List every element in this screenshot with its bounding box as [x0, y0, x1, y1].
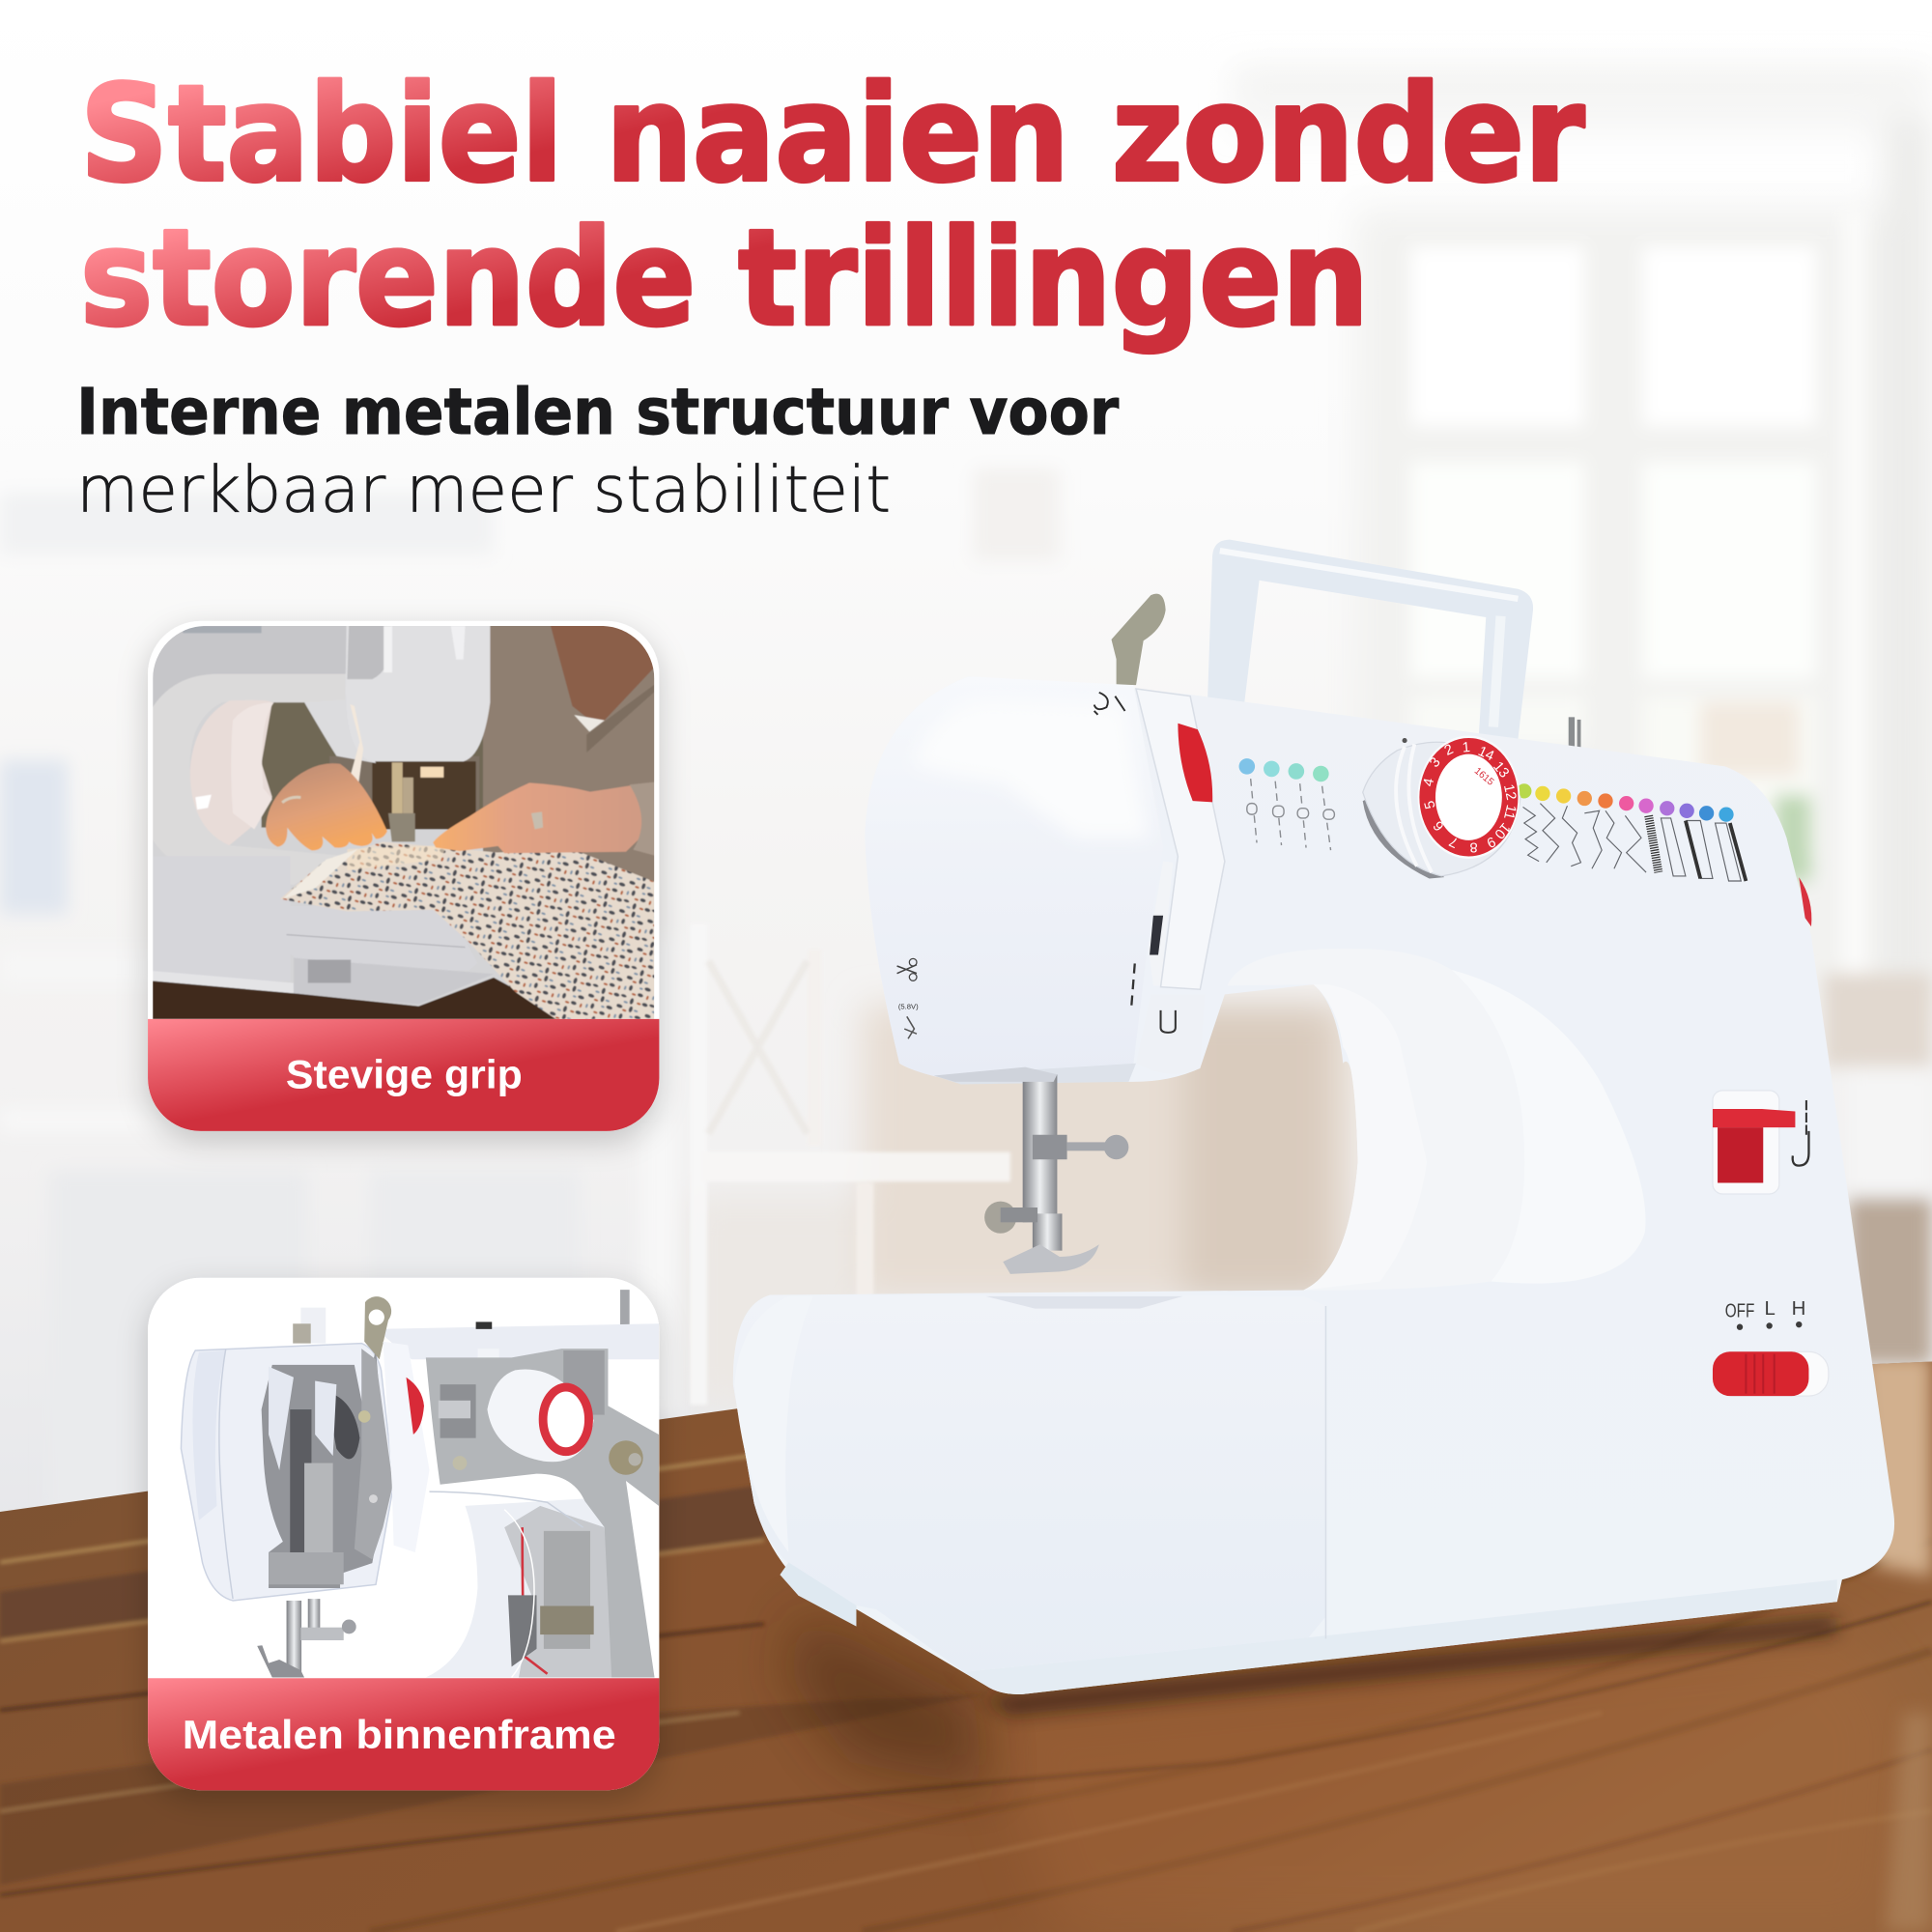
base front	[733, 1295, 1325, 1672]
presser foot	[392, 762, 403, 816]
photo: hands sewing fabric	[147, 620, 662, 1020]
frame	[426, 1349, 659, 1677]
lower body shell	[426, 1499, 605, 1677]
stitch colour dots	[1517, 783, 1734, 822]
label: Metalen binnenframe	[183, 1712, 616, 1757]
needle and presser foot	[934, 1067, 1128, 1274]
power switch labels	[1725, 1298, 1805, 1330]
red side knob	[1799, 877, 1811, 926]
table	[147, 978, 572, 1020]
card: Stevige grip	[147, 620, 662, 1131]
banner	[148, 1678, 659, 1790]
head cover	[865, 676, 1163, 1082]
thread	[350, 705, 363, 782]
sewing machine: (5.8V)	[898, 1003, 919, 1011]
front plate and gap	[1149, 862, 1173, 985]
stitch selector dial: 11	[1500, 803, 1519, 821]
tension icons and sliders	[1247, 779, 1334, 850]
stitch selector dial: 10	[1491, 819, 1513, 841]
backdrop inside throat	[262, 702, 483, 828]
label: Stevige grip	[286, 1051, 523, 1096]
stitch selector dial: 12	[1500, 783, 1519, 802]
stitch selector dial: 3	[1427, 754, 1444, 771]
lower strip	[963, 1579, 1837, 1694]
stitch selector dial: 2	[1442, 742, 1456, 759]
power switch labels: OFF	[1725, 1301, 1754, 1322]
stitch patterns	[1523, 804, 1746, 881]
right hand	[433, 782, 651, 853]
contact shadow	[850, 1614, 1836, 1716]
reverse lever	[1713, 1091, 1808, 1194]
wooden table	[0, 1355, 1932, 1932]
subtitle: Interne metalen structuur voor	[76, 374, 1119, 449]
base front step	[285, 906, 477, 971]
head	[346, 620, 490, 761]
arch inner wall	[1227, 949, 1524, 1291]
left hand	[266, 763, 387, 850]
fabric	[280, 841, 662, 1020]
arm and pillar	[276, 701, 303, 703]
subtitle: merkbaar meer stabiliteit	[76, 451, 891, 526]
subtitle	[76, 374, 1119, 526]
stitch selector dial: 13	[1490, 759, 1512, 781]
sewing machine	[733, 540, 1894, 1716]
stitch selector dial: 4	[1421, 777, 1437, 788]
title	[80, 57, 1584, 355]
thread guide lever	[1112, 594, 1166, 685]
dial	[487, 1370, 594, 1462]
inner mechanism	[262, 1349, 386, 1588]
red handwheel	[1178, 724, 1212, 802]
title: Stabiel naaien zonder	[80, 57, 1584, 212]
power switch	[1713, 1351, 1829, 1396]
stitch selector dial: 9	[1484, 833, 1497, 850]
stitch selector dial: 14	[1475, 744, 1496, 764]
stitch selector dial: 6	[1431, 817, 1448, 834]
stitch selector dial: 7	[1447, 833, 1461, 850]
free arm	[190, 700, 272, 845]
top rail	[376, 1323, 659, 1359]
pin	[1569, 717, 1575, 752]
stitch selector dial	[1363, 735, 1520, 878]
clear shell head	[181, 1344, 394, 1601]
stitch selector dial: 1	[1462, 740, 1471, 756]
stitch selector dial: 1615	[1472, 766, 1496, 788]
icons printed on head	[1094, 693, 1125, 715]
stitch selector dial: 8	[1469, 838, 1478, 854]
photo: transparent machine with metal frame	[148, 1278, 659, 1678]
neck	[304, 698, 376, 763]
base left block	[147, 856, 290, 981]
handle	[1208, 540, 1533, 739]
title: storende trillingen	[80, 201, 1369, 355]
power switch labels: H	[1792, 1298, 1805, 1320]
power switch labels: L	[1765, 1298, 1776, 1320]
stitch selector dial: 5	[1422, 799, 1439, 810]
machine body	[733, 676, 1894, 1694]
presser foot	[287, 1601, 301, 1677]
banner	[148, 1019, 659, 1131]
card: Metalen binnenframe	[148, 1278, 659, 1790]
